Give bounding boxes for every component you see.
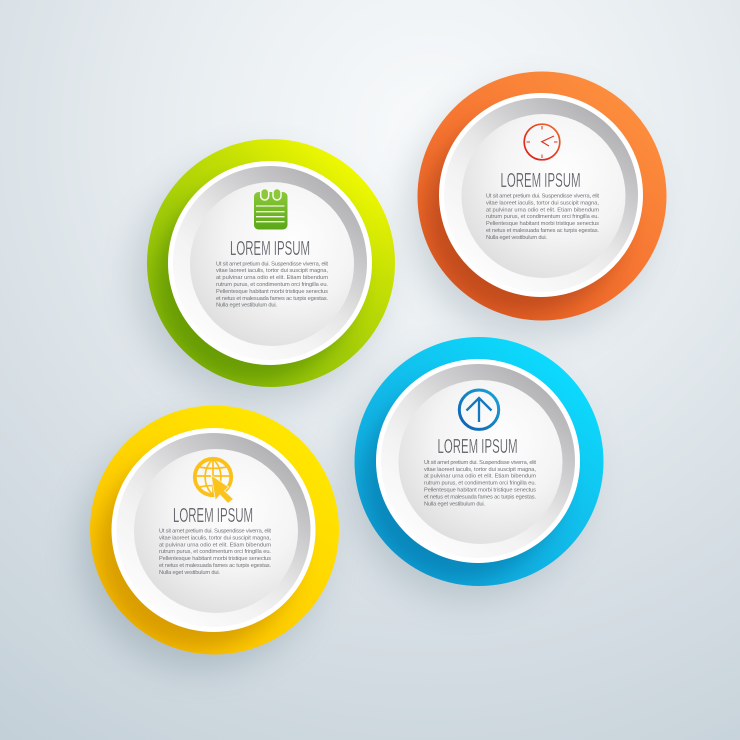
green body text: vitae laoreet iaculis, tortor dui suscipit magna, bbox=[216, 268, 328, 274]
orange ring inner shadow bbox=[426, 114, 626, 314]
orange inner face bbox=[462, 114, 626, 278]
green body text: et netus et malesuada fames ac turpis egestas. bbox=[216, 296, 328, 302]
orange body text: et netus et malesuada fames ac turpis egestas. bbox=[486, 228, 599, 234]
yellow white plate bbox=[112, 428, 316, 632]
yellow panel cast shadow bbox=[80, 425, 324, 669]
panel: orange clock bbox=[408, 72, 666, 334]
blue inner face bbox=[398, 380, 562, 544]
icon: globe with cursor bbox=[195, 459, 233, 503]
yellow body text: rutrum purus, et condimentum orci fringilla eu. bbox=[159, 549, 271, 555]
panel: green notes bbox=[137, 139, 395, 401]
green body text: at pulvinar urna odio et elit. Etiam bibendum bbox=[216, 275, 328, 281]
orange panel cast shadow bbox=[408, 90, 652, 334]
orange body text bbox=[486, 194, 599, 241]
green panel cast shadow bbox=[137, 157, 381, 401]
blue body text: vitae laoreet iaculis, tortor dui suscipit magna, bbox=[424, 467, 536, 473]
green body text: Nulla eget vestibulum dui. bbox=[216, 303, 277, 309]
yellow body text: Nulla eget vestibulum dui. bbox=[159, 570, 220, 576]
green body text: Ut sit amet pretium dui. Suspendisse viverra, elit bbox=[216, 261, 328, 267]
green body text: Pellentesque habitant morbi tristique senectus bbox=[216, 289, 328, 295]
green body text bbox=[216, 261, 328, 309]
blue heading: LOREM IPSUM bbox=[438, 436, 518, 458]
yellow body text: Ut sit amet pretium dui. Suspendisse viverra, elit bbox=[159, 528, 271, 534]
orange body text: Ut sit amet pretium dui. Suspendisse viverra, elit bbox=[486, 194, 599, 200]
icon: clock bbox=[524, 124, 560, 160]
blue body text: at pulvinar urna odio et elit. Etiam bibendum bbox=[424, 474, 536, 480]
orange outer ring bbox=[418, 72, 666, 320]
blue body text bbox=[424, 460, 536, 507]
green body text: rutrum purus, et condimentum orci fringilla eu. bbox=[216, 282, 328, 288]
green grey bevel bbox=[173, 166, 367, 360]
orange body text: Pellentesque habitant morbi tristique senectus bbox=[486, 221, 599, 227]
orange body text: at pulvinar urna odio et elit. Etiam bibendum bbox=[486, 207, 599, 213]
yellow body text: vitae laoreet iaculis, tortor dui suscipit magna, bbox=[159, 535, 271, 541]
yellow body text: at pulvinar urna odio et elit. Etiam bibendum bbox=[159, 542, 271, 548]
yellow outer ring bbox=[90, 406, 339, 654]
green ring inner shadow bbox=[155, 182, 355, 382]
orange body text: vitae laoreet iaculis, tortor dui suscipit magna, bbox=[486, 200, 599, 206]
icon: up arrow in circle bbox=[459, 390, 499, 429]
blue panel cast shadow bbox=[345, 356, 589, 600]
panel: yellow globe bbox=[80, 406, 339, 669]
blue body text: rutrum purus, et condimentum orci fringilla eu. bbox=[424, 481, 536, 487]
yellow ring inner shadow bbox=[98, 449, 298, 649]
blue grey bevel bbox=[381, 364, 575, 558]
blue body text: Ut sit amet pretium dui. Suspendisse viverra, elit bbox=[424, 460, 536, 466]
green outer ring bbox=[147, 139, 395, 387]
green heading: LOREM IPSUM bbox=[230, 238, 310, 260]
orange body text: Nulla eget vestibulum dui. bbox=[486, 235, 547, 241]
yellow body text: et netus et malesuada fames ac turpis egestas. bbox=[159, 563, 271, 569]
blue ring inner shadow bbox=[363, 380, 563, 580]
green white plate bbox=[168, 161, 372, 365]
yellow inner face bbox=[134, 449, 298, 613]
yellow grey bevel bbox=[116, 433, 310, 627]
blue body text: Nulla eget vestibulum dui. bbox=[424, 501, 485, 507]
panel: blue arrow bbox=[345, 337, 604, 600]
yellow body text: Pellentesque habitant morbi tristique senectus bbox=[159, 556, 271, 562]
yellow heading: LOREM IPSUM bbox=[173, 505, 253, 527]
blue outer ring bbox=[354, 337, 604, 586]
blue body text: Pellentesque habitant morbi tristique senectus bbox=[424, 488, 536, 494]
green inner face bbox=[190, 182, 354, 346]
blue body text: et netus et malesuada fames ac turpis egestas. bbox=[424, 494, 536, 500]
orange grey bevel bbox=[444, 98, 638, 292]
orange heading: LOREM IPSUM bbox=[500, 170, 580, 192]
orange white plate bbox=[439, 93, 643, 297]
blue white plate bbox=[376, 359, 580, 563]
yellow body text bbox=[159, 528, 271, 576]
icon: notepad bbox=[254, 188, 288, 230]
orange body text: rutrum purus, et condimentum orci fringilla eu. bbox=[486, 214, 599, 220]
